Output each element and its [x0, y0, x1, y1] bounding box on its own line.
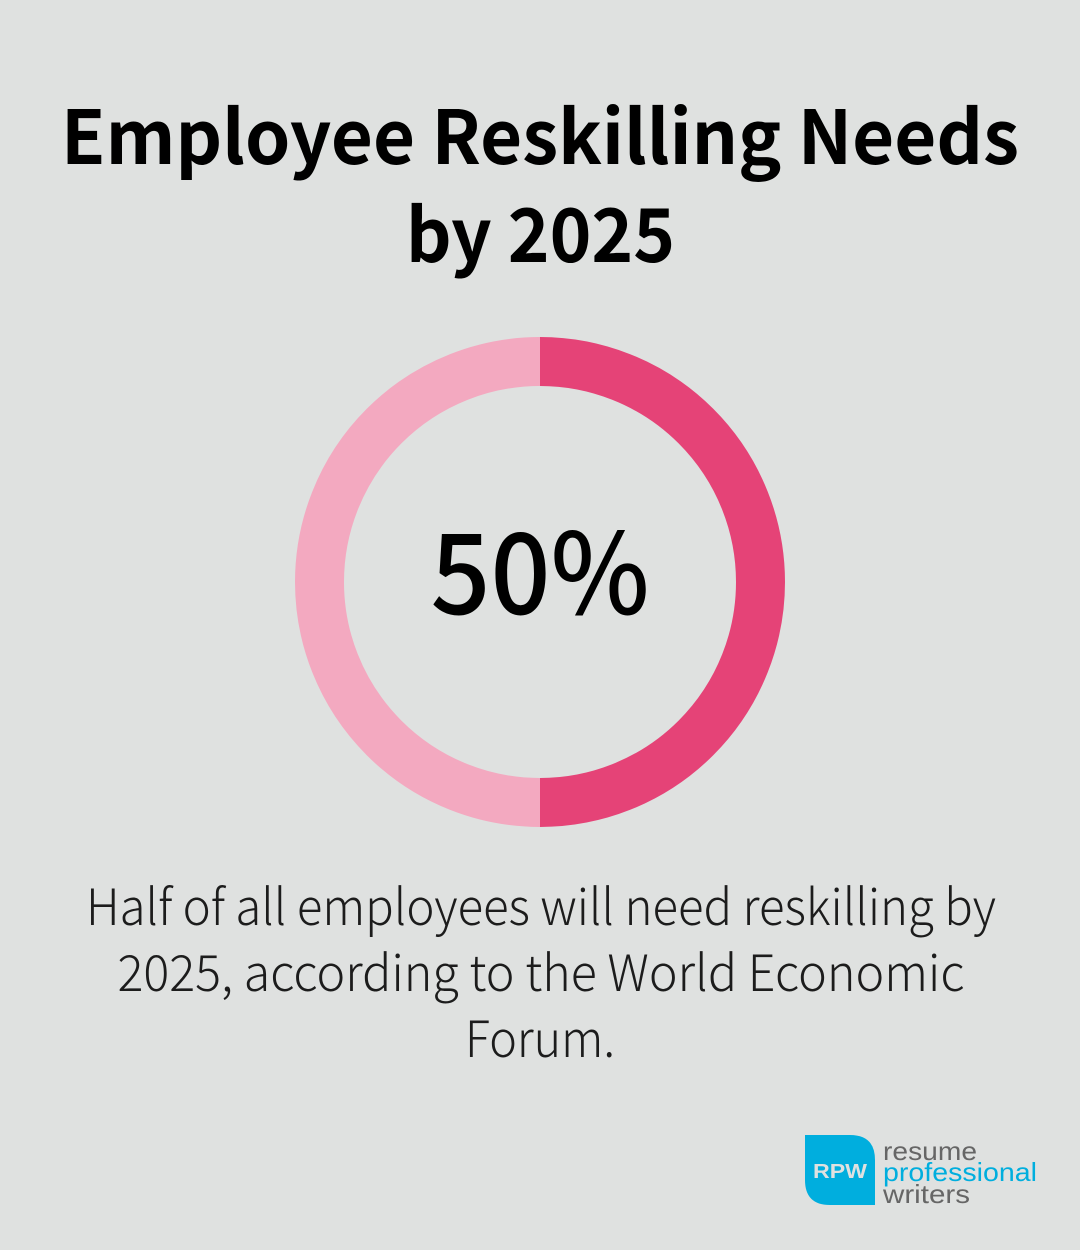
- description text: [86, 868, 996, 1072]
- description text: Half of all employees will need reskilling by: [86, 868, 996, 940]
- description text: 2025, according to the World Economic: [118, 934, 964, 1006]
- description text: Forum.: [465, 1000, 615, 1072]
- logo badge initials: RPW: [813, 1161, 867, 1183]
- title: by 2025: [406, 177, 675, 284]
- logo wordmark: resume: [883, 1136, 977, 1166]
- title: [61, 79, 1019, 284]
- logo wordmark: writers: [882, 1179, 970, 1209]
- highlighted half segment: [540, 362, 760, 802]
- logo wordmark: [882, 1136, 1037, 1209]
- remaining half segment: [320, 362, 540, 802]
- center value: 50%: [430, 485, 650, 647]
- donut chart: 50%: [320, 362, 760, 802]
- logo badge: [805, 1135, 875, 1205]
- logo: resume professional writers: [805, 1135, 1037, 1209]
- title: Employee Reskilling Needs: [61, 79, 1019, 186]
- logo wordmark: professional: [883, 1157, 1037, 1187]
